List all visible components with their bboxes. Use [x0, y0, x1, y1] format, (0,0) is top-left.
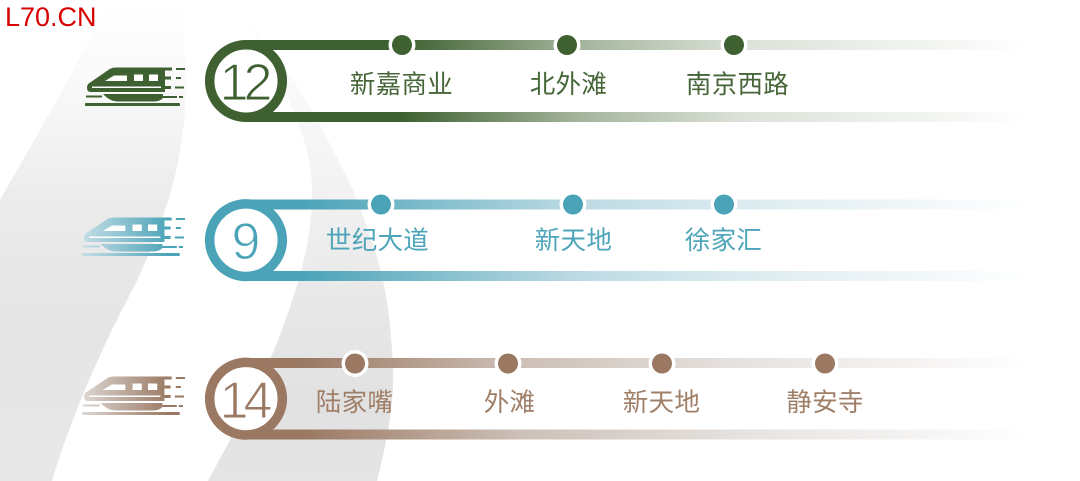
background swoosh: left band	[0, 0, 186, 481]
track and stops: line 12	[210, 32, 1036, 122]
stop: 徐家汇: 徐家汇	[685, 227, 762, 255]
stop: 新嘉商业	[350, 32, 453, 99]
train icon: line 12	[85, 68, 185, 106]
line number badge: 9	[210, 204, 282, 276]
stop: 陆家嘴: 陆家嘴	[316, 389, 393, 417]
line number badge: 9: 9	[232, 213, 260, 271]
stop: 世纪大道	[326, 191, 429, 255]
stop: 静安寺: 静安寺	[786, 389, 864, 417]
line number badge: 14: 14	[220, 372, 271, 430]
background swoosh: right band	[208, 0, 393, 481]
stop: 外滩	[484, 350, 535, 417]
line 14	[82, 350, 1036, 440]
stop: 新天地: 新天地	[535, 227, 612, 255]
line number badge: 12: 12	[220, 54, 270, 112]
track and stops: line 14	[210, 350, 1036, 440]
line 12	[85, 32, 1036, 122]
stop: 陆家嘴	[316, 350, 393, 417]
stop: 南京西路	[686, 32, 789, 99]
train icon: line 9	[82, 218, 185, 256]
line number badge: 14	[210, 362, 282, 435]
watermark: L70.CN	[5, 2, 97, 32]
stop: 新天地	[623, 350, 700, 417]
stop: 世纪大道: 世纪大道	[326, 227, 429, 255]
stop: 静安寺	[786, 350, 864, 417]
stop: 北外滩: 北外滩	[530, 71, 607, 99]
stop: 新天地	[535, 191, 612, 255]
line 9	[82, 191, 1036, 281]
stop: 外滩: 外滩	[484, 389, 535, 417]
track and stops: line 9	[210, 191, 1036, 281]
stop: 北外滩	[530, 32, 607, 99]
train icon: line 14	[82, 376, 185, 415]
stop: 徐家汇	[685, 191, 762, 255]
stop: 新天地: 新天地	[623, 389, 700, 417]
stop: 南京西路: 南京西路	[686, 71, 789, 99]
line number badge: 12	[210, 45, 282, 117]
stop: 新嘉商业: 新嘉商业	[350, 71, 453, 99]
